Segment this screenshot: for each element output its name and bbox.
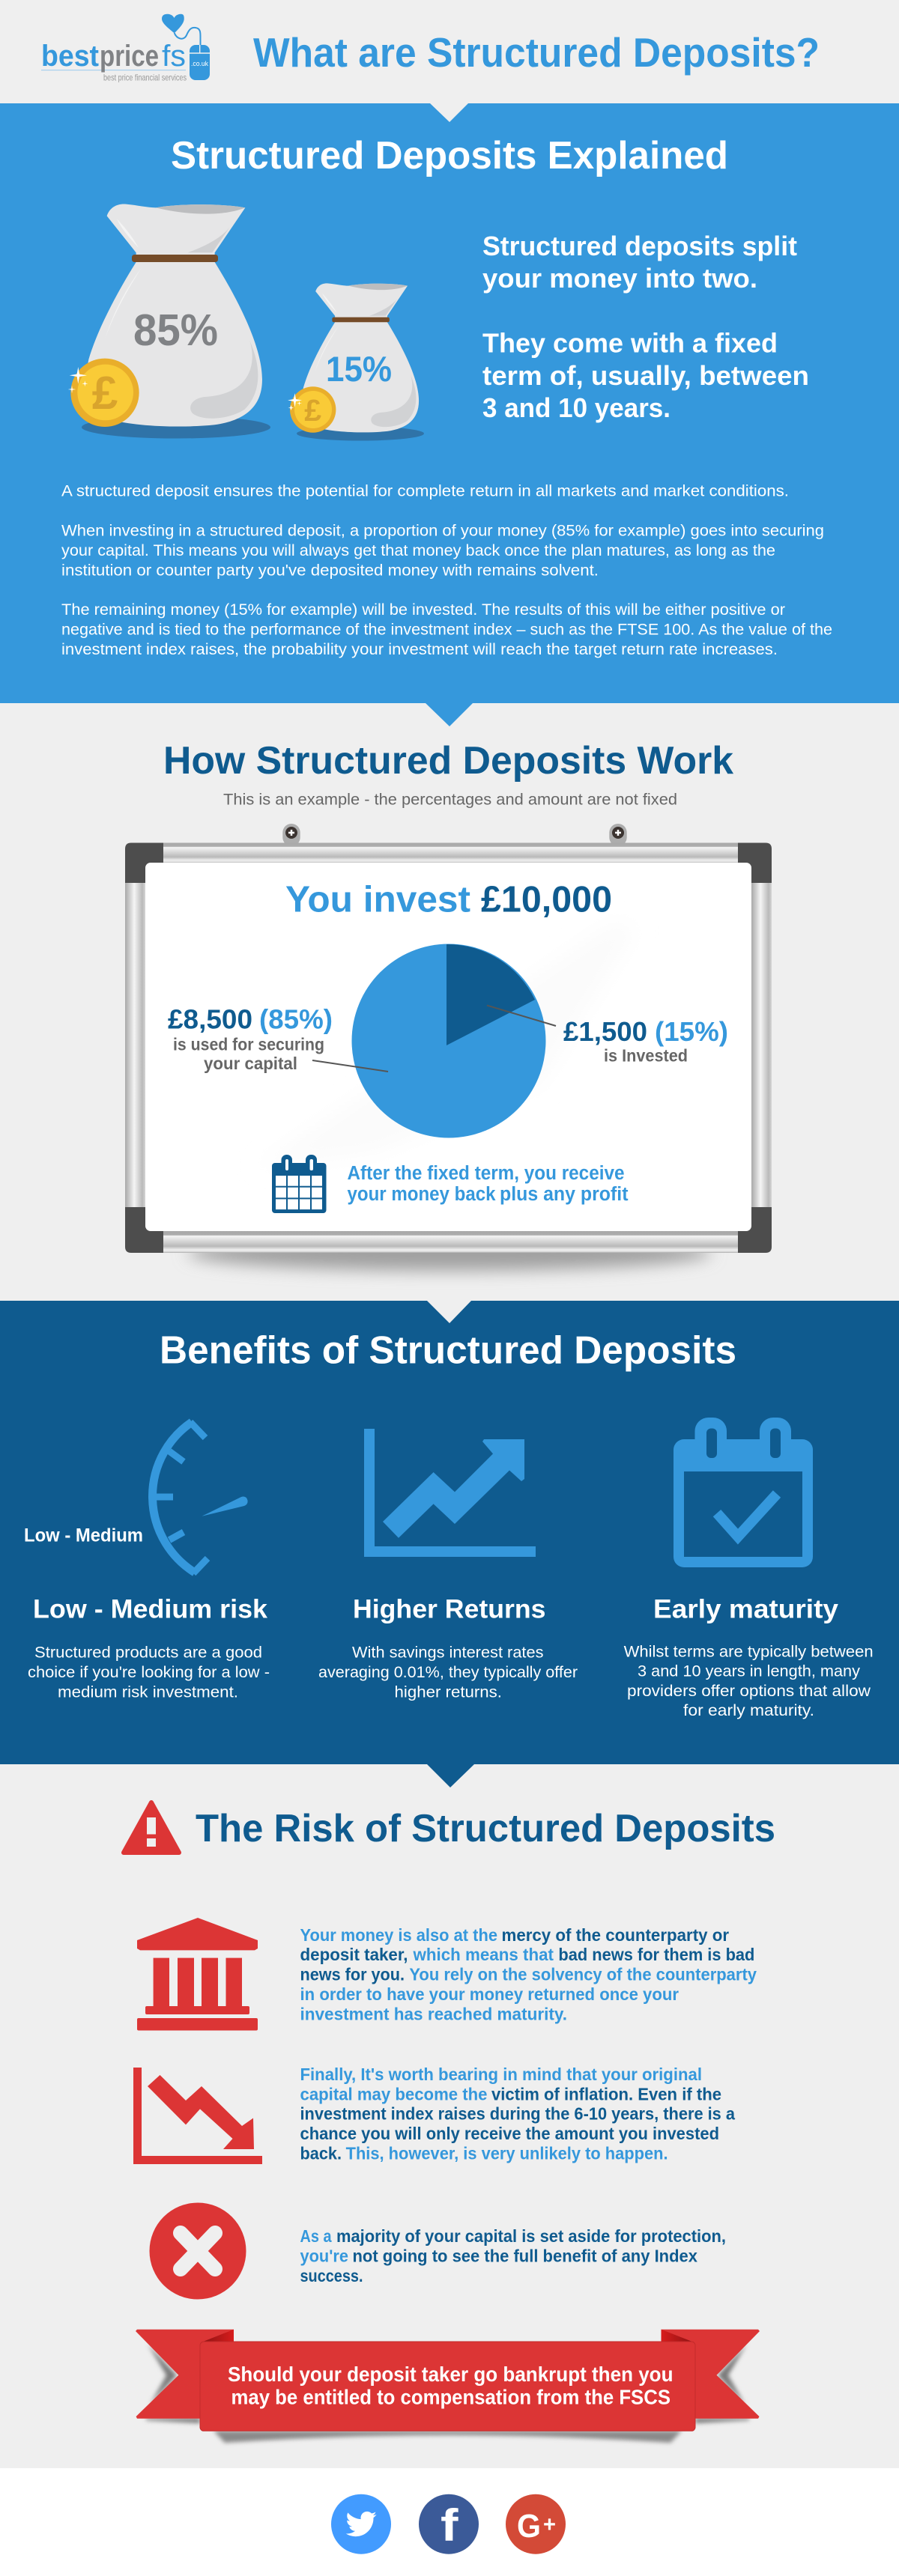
text block: inflation risk — [300, 2065, 736, 2163]
text block: counterparty risk: deposit taker, — [300, 1945, 408, 1964]
text block: limited upside: As a — [300, 2226, 332, 2246]
logo: bestpricefs — [41, 14, 210, 83]
icon: warning triangle — [124, 1802, 179, 1853]
text block: limited upside — [300, 2226, 726, 2285]
text block: inflation risk: victim of inflation. Even if the — [491, 2084, 721, 2103]
heading: The Risk of Structured Deposits — [196, 1807, 775, 1850]
icon: red cross circle — [150, 2203, 246, 2299]
text block: explanation: negative and is tied to the performance of the investment index – such as the FTSE 100. As the value of the — [61, 621, 832, 639]
panel: benefits of structured deposits — [0, 1301, 899, 1787]
icon: google plus: + — [543, 2512, 556, 2537]
icon: large money bag 85% — [68, 204, 270, 439]
icon: small money bag 15%: £ — [304, 393, 321, 428]
text block: split summary: Structured deposits split — [482, 231, 797, 261]
footer — [0, 2468, 899, 2576]
column: early maturity: Whilst terms are typically between — [624, 1642, 874, 1660]
icon: large money bag 85%: £ — [92, 368, 118, 419]
column: higher returns: higher returns. — [394, 1683, 502, 1701]
text block: explanation: A structured deposit ensures the potential for complete return in all markets and market conditions. — [61, 482, 789, 500]
text block: counterparty risk: news for you. — [300, 1965, 405, 1984]
heading: Benefits of Structured Deposits — [160, 1329, 736, 1373]
column: early maturity: Early maturity — [653, 1594, 838, 1624]
label: 85% capital — [168, 1004, 333, 1073]
text block: inflation risk: investment index raises during the 6-10 years, there is a — [300, 2104, 736, 2124]
text block: after the fixed term: plus any profit — [500, 1184, 629, 1205]
whiteboard — [125, 824, 772, 1271]
column: early maturity: providers offer options that allow — [627, 1682, 871, 1700]
panel: how structured deposits work — [125, 739, 772, 1271]
text block: counterparty risk: Your money is also at the — [300, 1925, 497, 1945]
ribbon callout: FSCS compensation: may be entitled to compensation from the FSCS — [231, 2386, 671, 2409]
text block: limited upside: you're — [300, 2246, 348, 2265]
text block: explanation — [61, 482, 832, 658]
text block: after the fixed term — [348, 1163, 629, 1205]
ribbon callout: FSCS compensation — [136, 2330, 760, 2443]
text block: explanation: your capital. This means you will always get that money back once the plan matures, as long as the — [61, 541, 775, 559]
column: early maturity: for early maturity. — [683, 1701, 814, 1719]
column: low-medium risk: Structured products are a good — [34, 1644, 262, 1662]
icon: small money bag 15% — [288, 283, 424, 440]
column: low-medium risk — [28, 1594, 270, 1701]
text block: split summary: term of, usually, between — [482, 360, 809, 391]
label: 15% invested: is Invested — [604, 1046, 688, 1066]
icon: large money bag 85%: 85% — [133, 306, 218, 355]
label: 85% capital: (85%) — [259, 1004, 333, 1035]
text block: explanation: investment index raises, the probability your investment will reach the target return rate increases. — [61, 640, 778, 658]
text block: limited upside: majority of your capital is set aside for protection, — [336, 2226, 726, 2246]
heading: How Structured Deposits Work — [163, 739, 733, 783]
pie chart — [312, 944, 556, 1138]
text block: counterparty risk: which means that — [413, 1945, 554, 1964]
column: early maturity — [624, 1594, 874, 1719]
column: low-medium risk: choice if you're looking for a low - — [28, 1663, 270, 1681]
text block: counterparty risk — [300, 1925, 757, 2024]
logo: bestpricefs: price — [100, 40, 159, 73]
logo: bestpricefs: best — [41, 40, 99, 73]
label: 15% invested: (15%) — [655, 1016, 728, 1047]
column: low-medium risk: medium risk investment. — [58, 1683, 238, 1701]
icon: rising chart — [364, 1429, 536, 1557]
text block: limited upside: not going to see the full benefit of any Index — [352, 2246, 697, 2265]
ribbon callout: FSCS compensation: Should your deposit taker go bankrupt then you — [228, 2363, 673, 2386]
text block: split summary: your money into two. — [482, 263, 757, 294]
board heading: you invest — [285, 879, 612, 920]
icon: bank — [137, 1918, 258, 2031]
text block: inflation risk: capital may become the — [300, 2084, 487, 2103]
text block: counterparty risk: mercy of the counterparty or — [502, 1925, 729, 1945]
label: 85% capital: your capital — [204, 1054, 297, 1073]
column: higher returns: Higher Returns — [353, 1594, 545, 1624]
heading: Structured Deposits Explained — [171, 134, 728, 177]
title: What are Structured Deposits? — [253, 29, 820, 76]
label: 85% capital: is used for securing — [173, 1035, 324, 1054]
icon: twitter — [331, 2494, 391, 2554]
text block: inflation risk: chance you will only receive the amount you invested — [300, 2124, 719, 2143]
column: higher returns — [318, 1594, 578, 1701]
panel: risk of structured deposits — [124, 1802, 775, 2443]
label: 15% invested — [563, 1016, 728, 1066]
icon: computer mouse: .co.uk — [191, 60, 208, 67]
text block: after the fixed term: After the fixed term, you receive — [348, 1163, 625, 1184]
board heading: you invest: You invest — [285, 879, 470, 920]
column: higher returns: With savings interest rates — [352, 1644, 544, 1662]
text block: counterparty risk: investment has reached maturity. — [300, 2005, 567, 2024]
text block: limited upside: success. — [300, 2266, 363, 2285]
logo: bestpricefs: best price financial services — [103, 72, 187, 82]
icon: facebook: f — [441, 2500, 459, 2551]
label: 85% capital: £8,500 — [168, 1004, 252, 1035]
text block: counterparty risk: bad news for them is bad — [558, 1945, 754, 1964]
text block: counterparty risk: You rely on the solvency of the counterparty — [409, 1965, 757, 1984]
text block: split summary: 3 and 10 years. — [482, 392, 671, 423]
icon: google plus — [506, 2494, 566, 2554]
text block: counterparty risk: in order to have your money returned once your — [300, 1984, 679, 2004]
text block: inflation risk: This, however, is very unlikely to happen. — [346, 2143, 668, 2163]
subheading: This is an example - the percentages and amount are not fixed — [223, 791, 677, 809]
icon: small money bag 15%: 15% — [326, 349, 392, 389]
icon: calendar check — [674, 1418, 813, 1567]
icon: risk gauge — [153, 1422, 248, 1573]
logo: bestpricefs: fs — [162, 40, 186, 73]
header — [0, 0, 899, 103]
icon: heart and cable — [162, 14, 201, 45]
panel: structured deposits explained — [0, 103, 899, 726]
text block: after the fixed term: your money back — [348, 1184, 496, 1205]
column: early maturity: 3 and 10 years in length, many — [638, 1662, 860, 1680]
icon: google plus: G — [517, 2508, 541, 2545]
icon: calendar — [272, 1155, 327, 1213]
icon: facebook — [419, 2494, 479, 2554]
icon: computer mouse — [190, 45, 210, 80]
text block: explanation: institution or counter party you've deposited money with remains solvent. — [61, 562, 599, 580]
label: 15% invested: £1,500 — [563, 1016, 647, 1047]
icon: falling chart — [133, 2068, 262, 2164]
text block: inflation risk: Finally, It's worth bearing in mind that your original — [300, 2065, 702, 2084]
text block: explanation: The remaining money (15% for example) will be invested. The results of this will be either positive or — [61, 601, 785, 619]
text block: inflation risk: back. — [300, 2143, 342, 2163]
column: low-medium risk: Low - Medium risk — [33, 1594, 267, 1624]
column: higher returns: averaging 0.01%, they typically offer — [318, 1663, 578, 1681]
text block: explanation: When investing in a structured deposit, a proportion of your money (85% for example) goes into securing — [61, 522, 824, 540]
gauge label: Low - Medium — [24, 1525, 143, 1546]
board heading: you invest: £10,000 — [481, 879, 612, 920]
text block: split summary: They come with a fixed — [482, 328, 778, 358]
text block: split summary — [482, 231, 809, 423]
